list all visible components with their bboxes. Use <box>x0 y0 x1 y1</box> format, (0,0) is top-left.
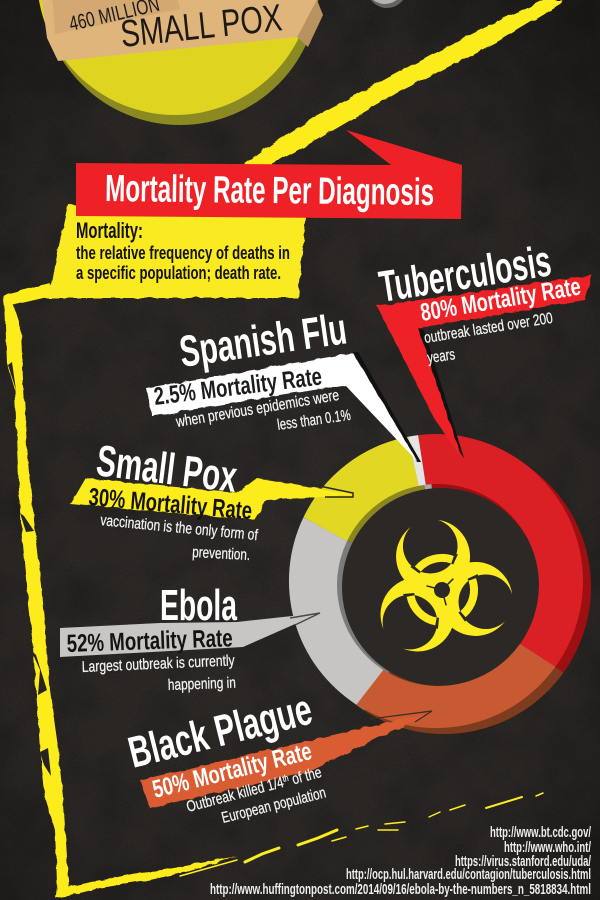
yellow connector line: upper diagonal <box>240 0 562 167</box>
note line 1: outbreak lasted over 200 <box>423 310 554 347</box>
chart side extrusion <box>297 440 591 734</box>
segment: tuberculosis <box>418 434 583 667</box>
pointer dark edge <box>370 711 432 722</box>
pointer dark edge <box>257 477 353 497</box>
note line 1: Largest outbreak is currently <box>81 652 235 676</box>
note line 2: less than 0.1% <box>276 407 352 434</box>
orange pointer <box>140 712 432 808</box>
yellow definition panel <box>45 204 306 298</box>
note line 1: Outbreak killed 1/4 <box>185 767 314 816</box>
pointer shadow <box>353 352 421 462</box>
callout: black plague <box>124 685 432 827</box>
title banner <box>76 130 462 219</box>
heading: Ebola <box>160 581 237 630</box>
definition text line 1: the relative frequency of deaths in <box>76 242 290 263</box>
segment: spanish flu <box>408 435 426 486</box>
callout: small pox <box>70 436 355 564</box>
note line 2: happening in <box>168 675 236 694</box>
heading: Spanish Flu <box>176 304 350 377</box>
rate: 2.5% Mortality Rate <box>152 363 324 411</box>
note line 2: European population <box>220 785 328 827</box>
donut chart: mortality by disease <box>289 434 591 734</box>
dashed fading yellow trail <box>180 793 543 876</box>
white pointer <box>146 353 418 462</box>
note line 1: th <box>281 773 289 784</box>
note line 1: vaccination is the only form of <box>100 512 259 544</box>
callout: ebola <box>60 581 320 694</box>
rate: 52% Mortality Rate <box>66 624 233 658</box>
callout: tuberculosis <box>376 236 592 458</box>
definition text line 2: a specific population; death rate. <box>76 262 281 283</box>
note line 2: years <box>426 346 456 367</box>
note line 1: when previous epidemics were <box>174 387 340 431</box>
pointer dark edge <box>290 613 320 625</box>
grey pill fragment <box>366 0 407 8</box>
heading: Small Pox <box>94 436 240 502</box>
segment: small pox <box>304 437 419 541</box>
rate: 50% Mortality Rate <box>150 737 315 804</box>
chart centre <box>342 488 540 686</box>
yellow connector line: left edge and bottom <box>3 283 237 898</box>
icon: biohazard symbol <box>349 503 535 675</box>
source links <box>210 824 592 898</box>
segment: black plague <box>356 644 555 728</box>
pill: small pox disc with tape <box>37 0 323 125</box>
segment: ebola <box>289 517 383 705</box>
rate: 30% Mortality Rate <box>87 483 253 525</box>
tape strips <box>42 0 323 61</box>
yellow pointer <box>70 478 355 520</box>
heading: Black Plague <box>124 685 317 778</box>
pointer shadow <box>418 328 464 458</box>
note line 1: of the <box>287 764 323 789</box>
note line 2: prevention. <box>192 544 251 564</box>
red pointer <box>377 275 592 458</box>
definition heading: Mortality: <box>76 218 143 243</box>
grey pointer <box>60 613 320 657</box>
callout: spanish flu <box>146 304 421 462</box>
